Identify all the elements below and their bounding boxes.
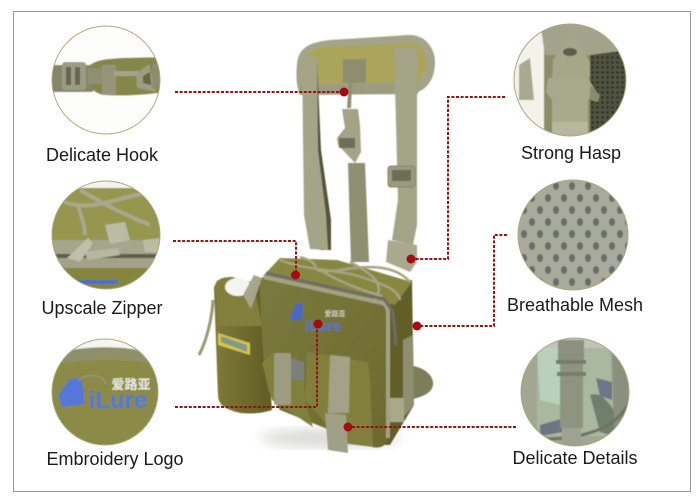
detail circle: delicate details <box>522 338 628 446</box>
drawcord <box>199 300 213 355</box>
circle outline: logo <box>52 339 158 445</box>
slider buckle <box>388 166 415 187</box>
pouch label <box>218 333 250 355</box>
label: breathable mesh: Breathable Mesh <box>507 295 643 315</box>
label: embroidery logo: Embroidery Logo <box>46 449 184 469</box>
detail circle: delicate hook <box>52 56 160 96</box>
zipper pull <box>243 275 262 309</box>
embroidered logo: iLure <box>305 318 341 335</box>
right strap <box>392 48 417 245</box>
circle outline: hook <box>52 26 160 134</box>
label: delicate hook: Delicate Hook <box>46 145 159 165</box>
detail circle: embroidery logo <box>52 340 158 444</box>
white bottle <box>225 278 251 296</box>
left strap <box>315 60 331 250</box>
circle outline: hasp <box>514 24 626 136</box>
label: upscale zipper: Upscale Zipper <box>41 298 163 318</box>
front right pocket <box>305 352 373 447</box>
embroidered logo: 爱路亚 <box>324 309 346 318</box>
label: strong hasp: Strong Hasp <box>521 143 621 163</box>
circle outline: zipper <box>52 181 160 289</box>
callout dots <box>291 88 422 432</box>
right rear strap <box>413 366 433 399</box>
detail circle: upscale zipper <box>52 182 160 288</box>
circle outline: mesh <box>518 180 628 290</box>
zipper trim <box>264 277 388 438</box>
bag lid with cord net <box>263 258 412 305</box>
bottle pouch <box>214 277 272 414</box>
hook <box>343 59 366 83</box>
circle outline: details <box>521 338 629 446</box>
side panel <box>378 280 414 445</box>
front left pocket <box>262 353 313 427</box>
detail circle: breathable mesh <box>518 180 628 290</box>
detail circle: strong hasp <box>514 24 626 136</box>
front buckle <box>325 413 348 453</box>
detail circle: embroidery logo: iLure <box>89 387 147 414</box>
embroidered logo <box>290 303 346 335</box>
product photo: bag with straps <box>199 35 435 453</box>
label: delicate details: Delicate Details <box>512 448 638 468</box>
leader lines <box>173 92 516 427</box>
shoulder pad <box>296 35 435 95</box>
detail circle: embroidery logo: 爱路亚 <box>111 377 151 392</box>
rear strap <box>348 163 369 262</box>
bag front panel <box>260 277 388 448</box>
